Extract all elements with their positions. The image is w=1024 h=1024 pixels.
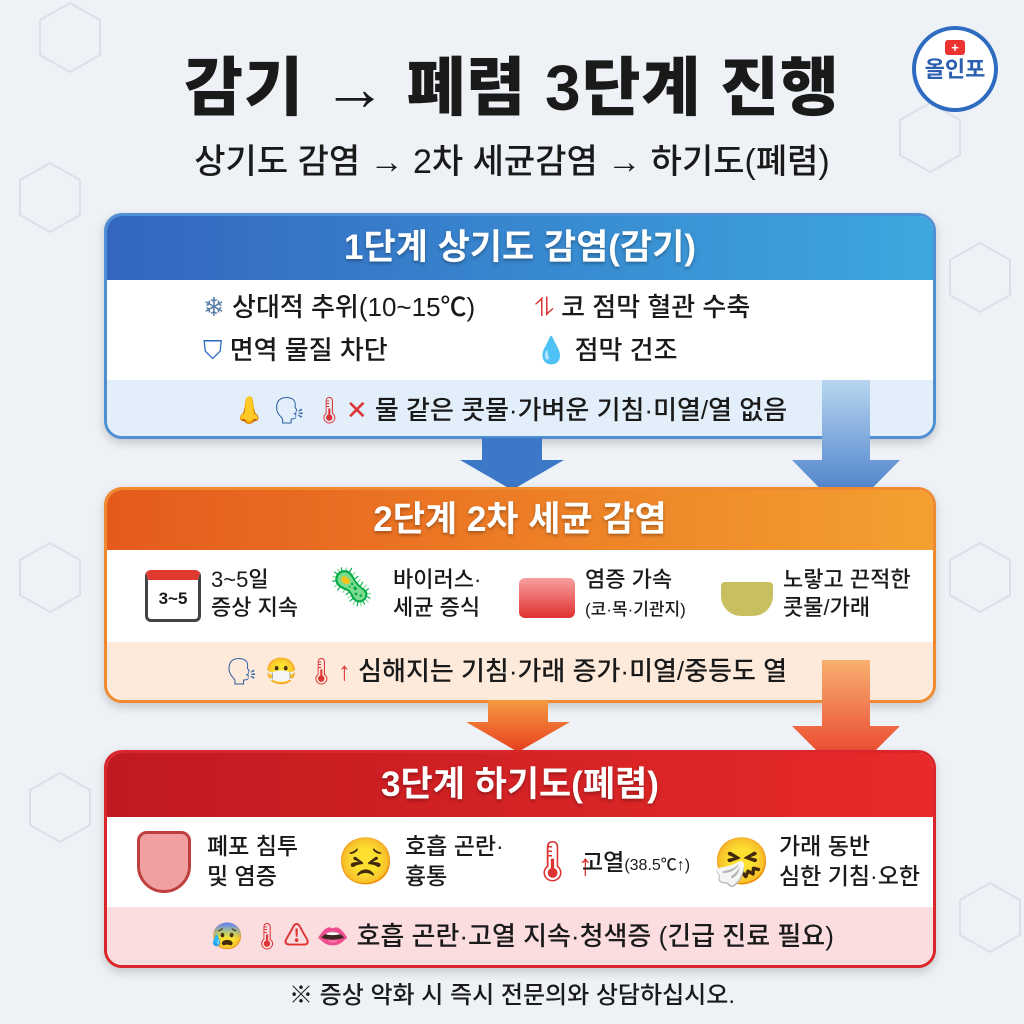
- item: dry: 💧 점막 건조: [535, 335, 678, 365]
- symptom bar stage 1: [107, 380, 933, 440]
- heading stage 1: 1단계 상기도 감염(감기): [344, 228, 696, 267]
- heading stage 1: [107, 216, 933, 280]
- item: virus: 🦠: [329, 566, 374, 607]
- panel: stage 3: 가래 동반: [779, 833, 870, 859]
- panel: stage 2: (코·목·기관지): [585, 600, 686, 619]
- panel: stage 3: 호흡 곤란·: [405, 833, 504, 859]
- panel: stage 3: [104, 750, 936, 968]
- subtitle: 상기도 감염 → 2차 세균감염 → 하기도(폐렴): [194, 143, 830, 181]
- item: alveoli: [137, 831, 191, 893]
- arrow: stage2 to stage3 right: [792, 660, 900, 750]
- item: 3-5 days: 3~5: [159, 589, 187, 608]
- panel: stage 3: 심한 기침·오한: [779, 863, 920, 889]
- item: breathing: 😣: [337, 835, 394, 887]
- panel: stage 2: 노랗고 끈적한: [783, 567, 911, 592]
- arrow: stage1 to stage2 right: [792, 380, 900, 487]
- panel: stage 2: 바이러스·: [393, 567, 481, 592]
- panel: stage 3: 흉통: [405, 863, 447, 889]
- title: 감기 → 폐렴 3단계 진행: [184, 52, 840, 124]
- item: inflammation: [519, 578, 575, 618]
- panel: stage 2: [104, 487, 936, 703]
- panel: stage 1: [104, 213, 936, 439]
- item: 3-5 days: [145, 570, 201, 622]
- symptom bar stage 3: 😰 🌡⚠ 👄 호흡 곤란·고열 지속·청색증 (긴급 진료 필요): [211, 921, 834, 951]
- panel: stage 2: 3~5일: [211, 567, 269, 592]
- panel: stage 2: 염증 가속: [585, 567, 672, 592]
- heading stage 2: [107, 490, 933, 550]
- item: immune: ⛉ 면역 물질 차단: [203, 335, 388, 365]
- panel: stage 2: 콧물/가래: [783, 595, 870, 620]
- item: vasoconstriction: ⥮ 코 점막 혈관 수축: [535, 292, 750, 322]
- panel: stage 2: 세균 증식: [393, 595, 480, 620]
- icon: medical kit: +: [951, 40, 959, 55]
- symptom bar stage 2: [107, 642, 933, 700]
- footer note: ※ 증상 악화 시 즉시 전문의와 상담하십시오.: [289, 982, 735, 1009]
- heading stage 2: 2단계 2차 세균 감염: [373, 500, 667, 539]
- arrow: stage1 to stage2 center: [460, 438, 564, 487]
- panel: stage 3: 폐포 침투: [207, 833, 298, 859]
- item: fever: 🌡↑: [527, 840, 593, 884]
- item: cold: ❄ 상대적 추위(10~15℃): [203, 292, 475, 322]
- panel: stage 3: 고열(38.5℃↑): [582, 849, 690, 875]
- icon: medical kit: [945, 40, 965, 55]
- logo: 올인포: [925, 57, 985, 82]
- symptom bar stage 2: 🗣 😷 🌡↑ 심해지는 기침·가래 증가·미열/중등도 열: [225, 656, 787, 686]
- panel: stage 3: 및 염증: [207, 863, 277, 889]
- item: cough: 🤧: [713, 835, 770, 887]
- heading stage 3: 3단계 하기도(폐렴): [381, 765, 659, 804]
- symptom bar stage 1: 👃 🗣 🌡✕ 물 같은 콧물·가벼운 기침·미열/열 없음: [233, 395, 787, 425]
- arrow: stage2 to stage3 center: [466, 700, 570, 750]
- panel: stage 2: 증상 지속: [211, 595, 298, 620]
- heading stage 3: [107, 753, 933, 817]
- item: mucus: [721, 582, 773, 616]
- logo: [912, 26, 998, 112]
- symptom bar stage 3: [107, 907, 933, 965]
